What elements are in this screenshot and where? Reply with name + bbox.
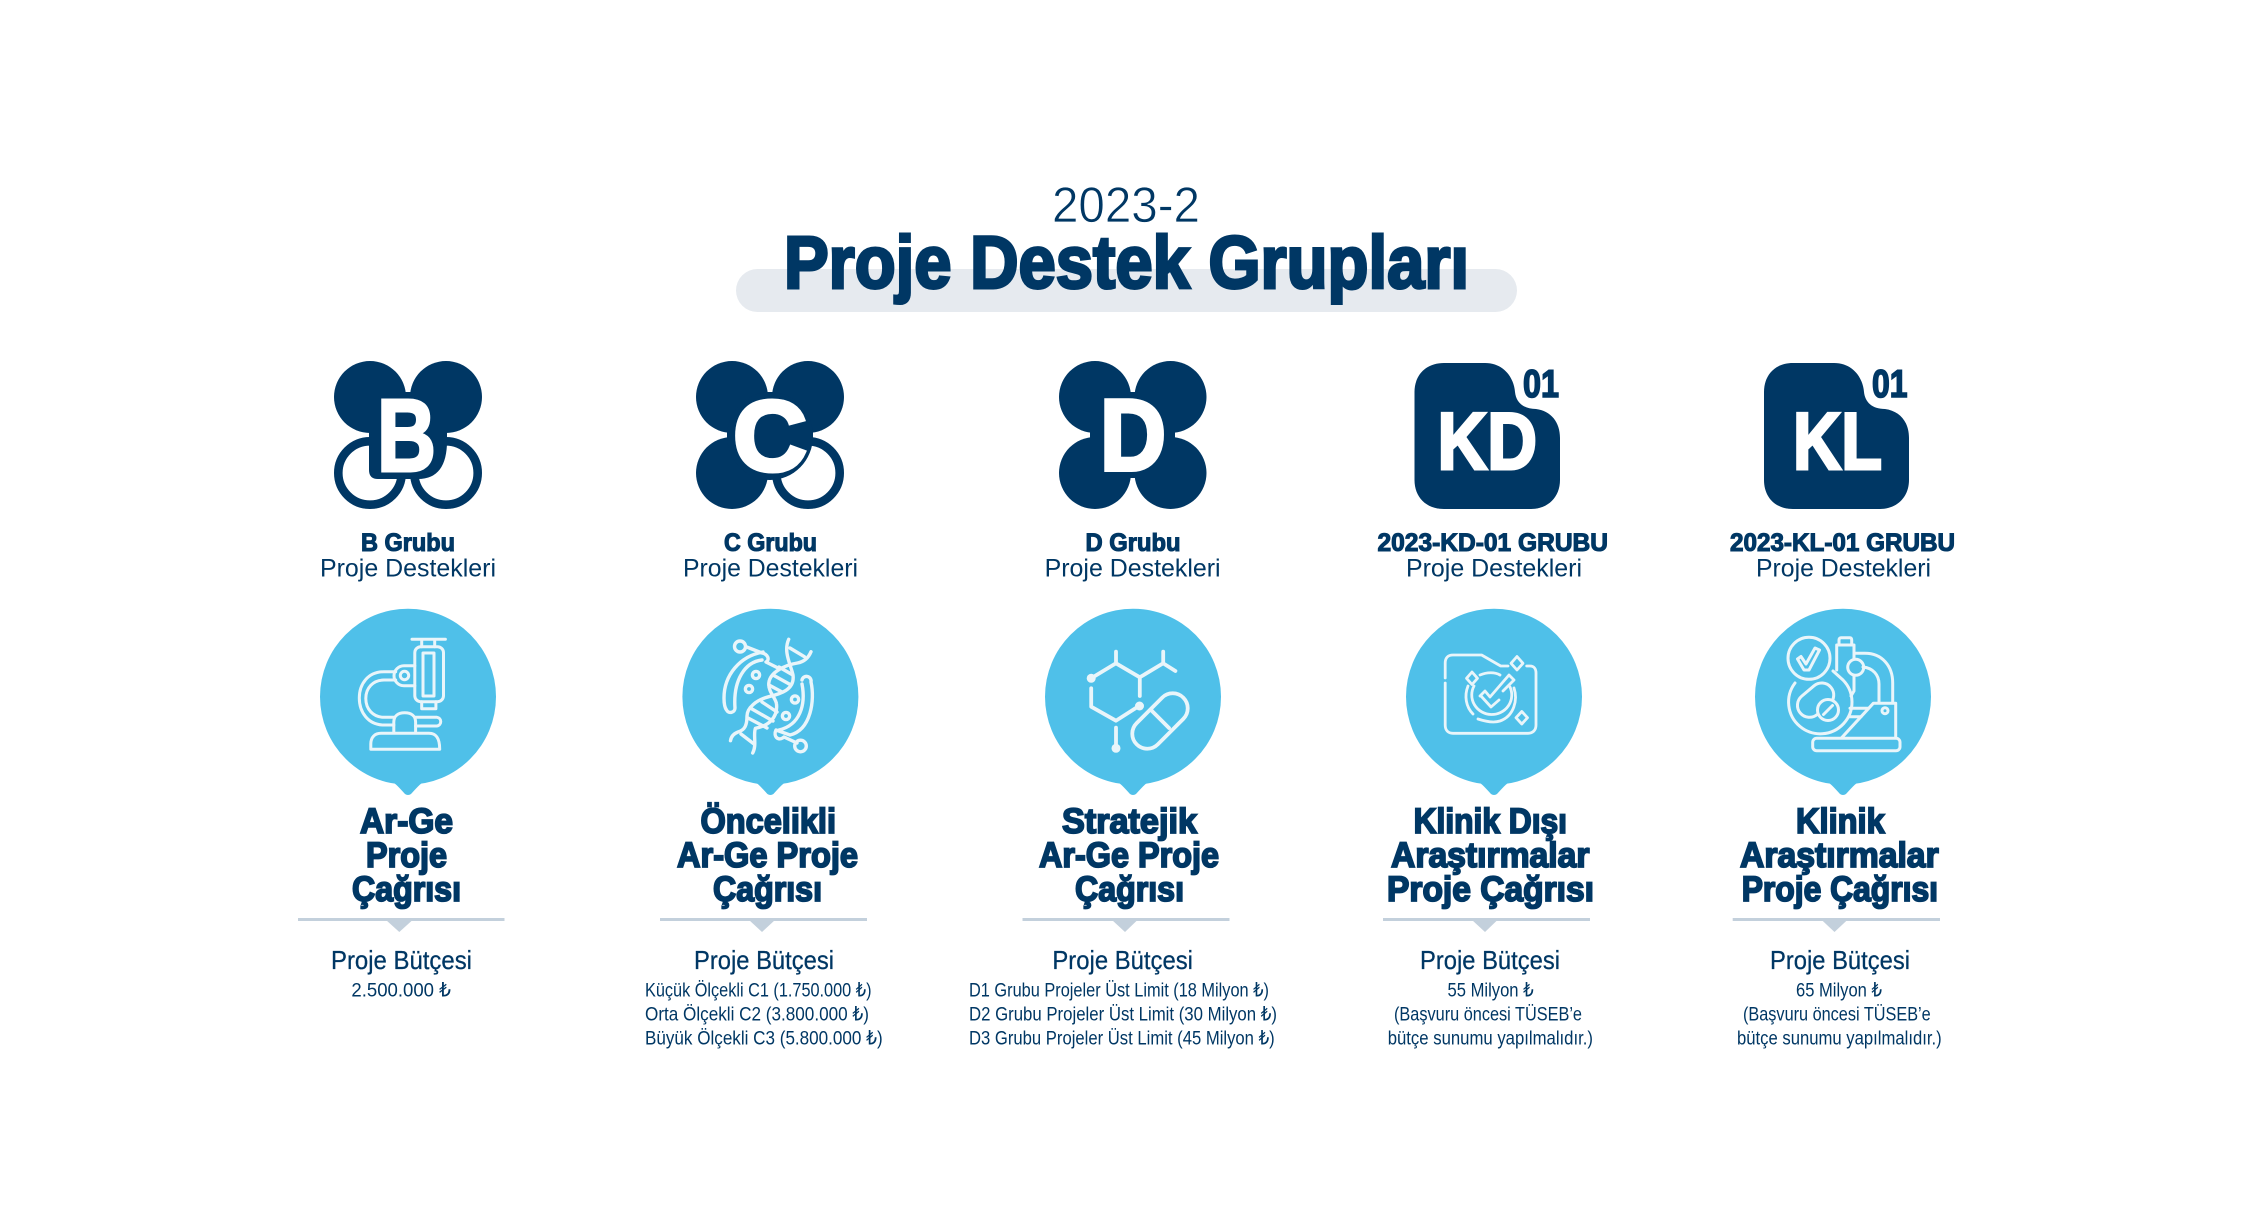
budget text xyxy=(645,945,883,1049)
heading: call name: Çağrısı xyxy=(713,870,822,909)
title pill background xyxy=(736,269,1517,312)
budget text: bütçe sunumu yapılmalıdır.) xyxy=(1737,1027,1942,1049)
divider with pointer xyxy=(1022,918,1230,932)
icon: D group logo xyxy=(1059,361,1206,509)
group label: 2023-KD-01 GRUBU xyxy=(1378,529,1608,557)
icon: KL-01 logo: KL xyxy=(1793,397,1882,487)
icon: B group logo xyxy=(334,361,482,505)
icon: KD-01 logo: KD xyxy=(1438,397,1537,487)
budget text: D2 Grubu Projeler Üst Limit (30 Milyon ₺) xyxy=(969,1004,1277,1026)
group label: Proje Destekleri xyxy=(1406,554,1582,582)
icon: C group logo xyxy=(696,361,844,509)
icon: C group logo: C xyxy=(733,380,807,492)
icon: KD-01 logo: 01 xyxy=(1523,363,1559,406)
divider with pointer xyxy=(1733,918,1940,932)
group label: 2023-KL-01 GRUBU xyxy=(1730,529,1955,557)
heading: call name: Klinik Dışı xyxy=(1414,802,1567,841)
budget text: Proje Bütçesi xyxy=(1770,945,1910,975)
icon: microscope bubble xyxy=(320,609,496,795)
budget text: D3 Grubu Projeler Üst Limit (45 Milyon ₺) xyxy=(969,1027,1275,1049)
budget text: Proje Bütçesi xyxy=(331,945,472,975)
group label: Proje Destekleri xyxy=(1756,554,1931,582)
heading: call name: Araştırmalar xyxy=(1740,836,1939,875)
budget text: Küçük Ölçekli C1 (1.750.000 ₺) xyxy=(645,980,872,1002)
budget text: (Başvuru öncesi TÜSEB’e xyxy=(1743,1004,1931,1026)
icon: folder check bubble xyxy=(1406,609,1582,795)
divider with pointer xyxy=(660,918,867,932)
budget text: D1 Grubu Projeler Üst Limit (18 Milyon ₺) xyxy=(969,980,1269,1002)
icon: KL-01 logo xyxy=(1764,363,1909,509)
divider with pointer xyxy=(298,918,504,932)
group label: C Grubu xyxy=(724,529,817,557)
budget text: (Başvuru öncesi TÜSEB’e xyxy=(1394,1004,1582,1026)
group label xyxy=(320,529,496,582)
budget text xyxy=(1737,945,1942,1049)
heading: call name: Proje Çağrısı xyxy=(1387,870,1594,909)
budget text: Proje Bütçesi xyxy=(1420,945,1560,975)
icon: B group logo: B xyxy=(377,378,436,493)
heading: call name: Klinik xyxy=(1796,802,1885,841)
icon: molecule and pill bubble xyxy=(1045,609,1221,795)
heading: call name: Çağrısı xyxy=(352,870,461,909)
year heading: 2023-2 xyxy=(1052,177,1200,233)
group label: D Grubu xyxy=(1086,529,1180,557)
budget text: Proje Bütçesi xyxy=(694,945,834,975)
panel: B group xyxy=(298,361,504,1002)
group label xyxy=(1730,529,1955,582)
heading: call name xyxy=(1039,802,1219,909)
heading: call name: Stratejik xyxy=(1062,802,1198,841)
heading: call name: Çağrısı xyxy=(1075,870,1184,909)
main title: Proje Destek Grupları xyxy=(784,221,1469,304)
icon: D group logo: D xyxy=(1100,380,1166,492)
group label xyxy=(683,529,858,582)
group label: Proje Destekleri xyxy=(1045,554,1221,582)
group label xyxy=(1045,529,1221,582)
icon: DNA bubble xyxy=(682,609,858,795)
budget text: 2.500.000 ₺ xyxy=(351,980,451,1002)
budget text: bütçe sunumu yapılmalıdır.) xyxy=(1388,1027,1593,1049)
heading: call name xyxy=(677,802,858,909)
budget text: 55 Milyon ₺ xyxy=(1448,980,1534,1002)
heading: call name: Ar-Ge Proje xyxy=(1039,836,1219,875)
budget text xyxy=(1388,945,1593,1049)
heading: call name: Proje Çağrısı xyxy=(1742,870,1938,909)
heading: call name: Ar-Ge xyxy=(360,802,453,841)
group label xyxy=(1378,529,1608,582)
budget text: Proje Bütçesi xyxy=(1052,945,1193,975)
budget text: 65 Milyon ₺ xyxy=(1796,980,1882,1002)
title block xyxy=(736,177,1517,312)
budget text xyxy=(331,945,472,1002)
heading: call name: Araştırmalar xyxy=(1391,836,1590,875)
panel: KL group xyxy=(1730,363,1955,1049)
group label: Proje Destekleri xyxy=(683,554,858,582)
group label: Proje Destekleri xyxy=(320,554,496,582)
heading: call name: Öncelikli xyxy=(700,802,836,841)
divider with pointer xyxy=(1383,918,1590,932)
budget text: Büyük Ölçekli C3 (5.800.000 ₺) xyxy=(645,1027,883,1049)
budget text xyxy=(969,945,1277,1049)
heading: call name: Ar-Ge Proje xyxy=(677,836,858,875)
group label: B Grubu xyxy=(361,529,455,557)
icon: KL-01 logo: 01 xyxy=(1872,363,1908,406)
icon: clinical microscope bubble xyxy=(1755,609,1931,795)
heading: call name: Proje xyxy=(366,836,447,875)
budget text: Orta Ölçekli C2 (3.800.000 ₺) xyxy=(645,1004,869,1026)
panel: KD group xyxy=(1378,363,1608,1049)
icon: KD-01 logo xyxy=(1414,363,1560,509)
panel: D group xyxy=(969,361,1277,1049)
heading: call name xyxy=(1387,802,1594,909)
panel: C group xyxy=(645,361,883,1049)
heading: call name xyxy=(352,802,461,909)
heading: call name xyxy=(1740,802,1939,909)
